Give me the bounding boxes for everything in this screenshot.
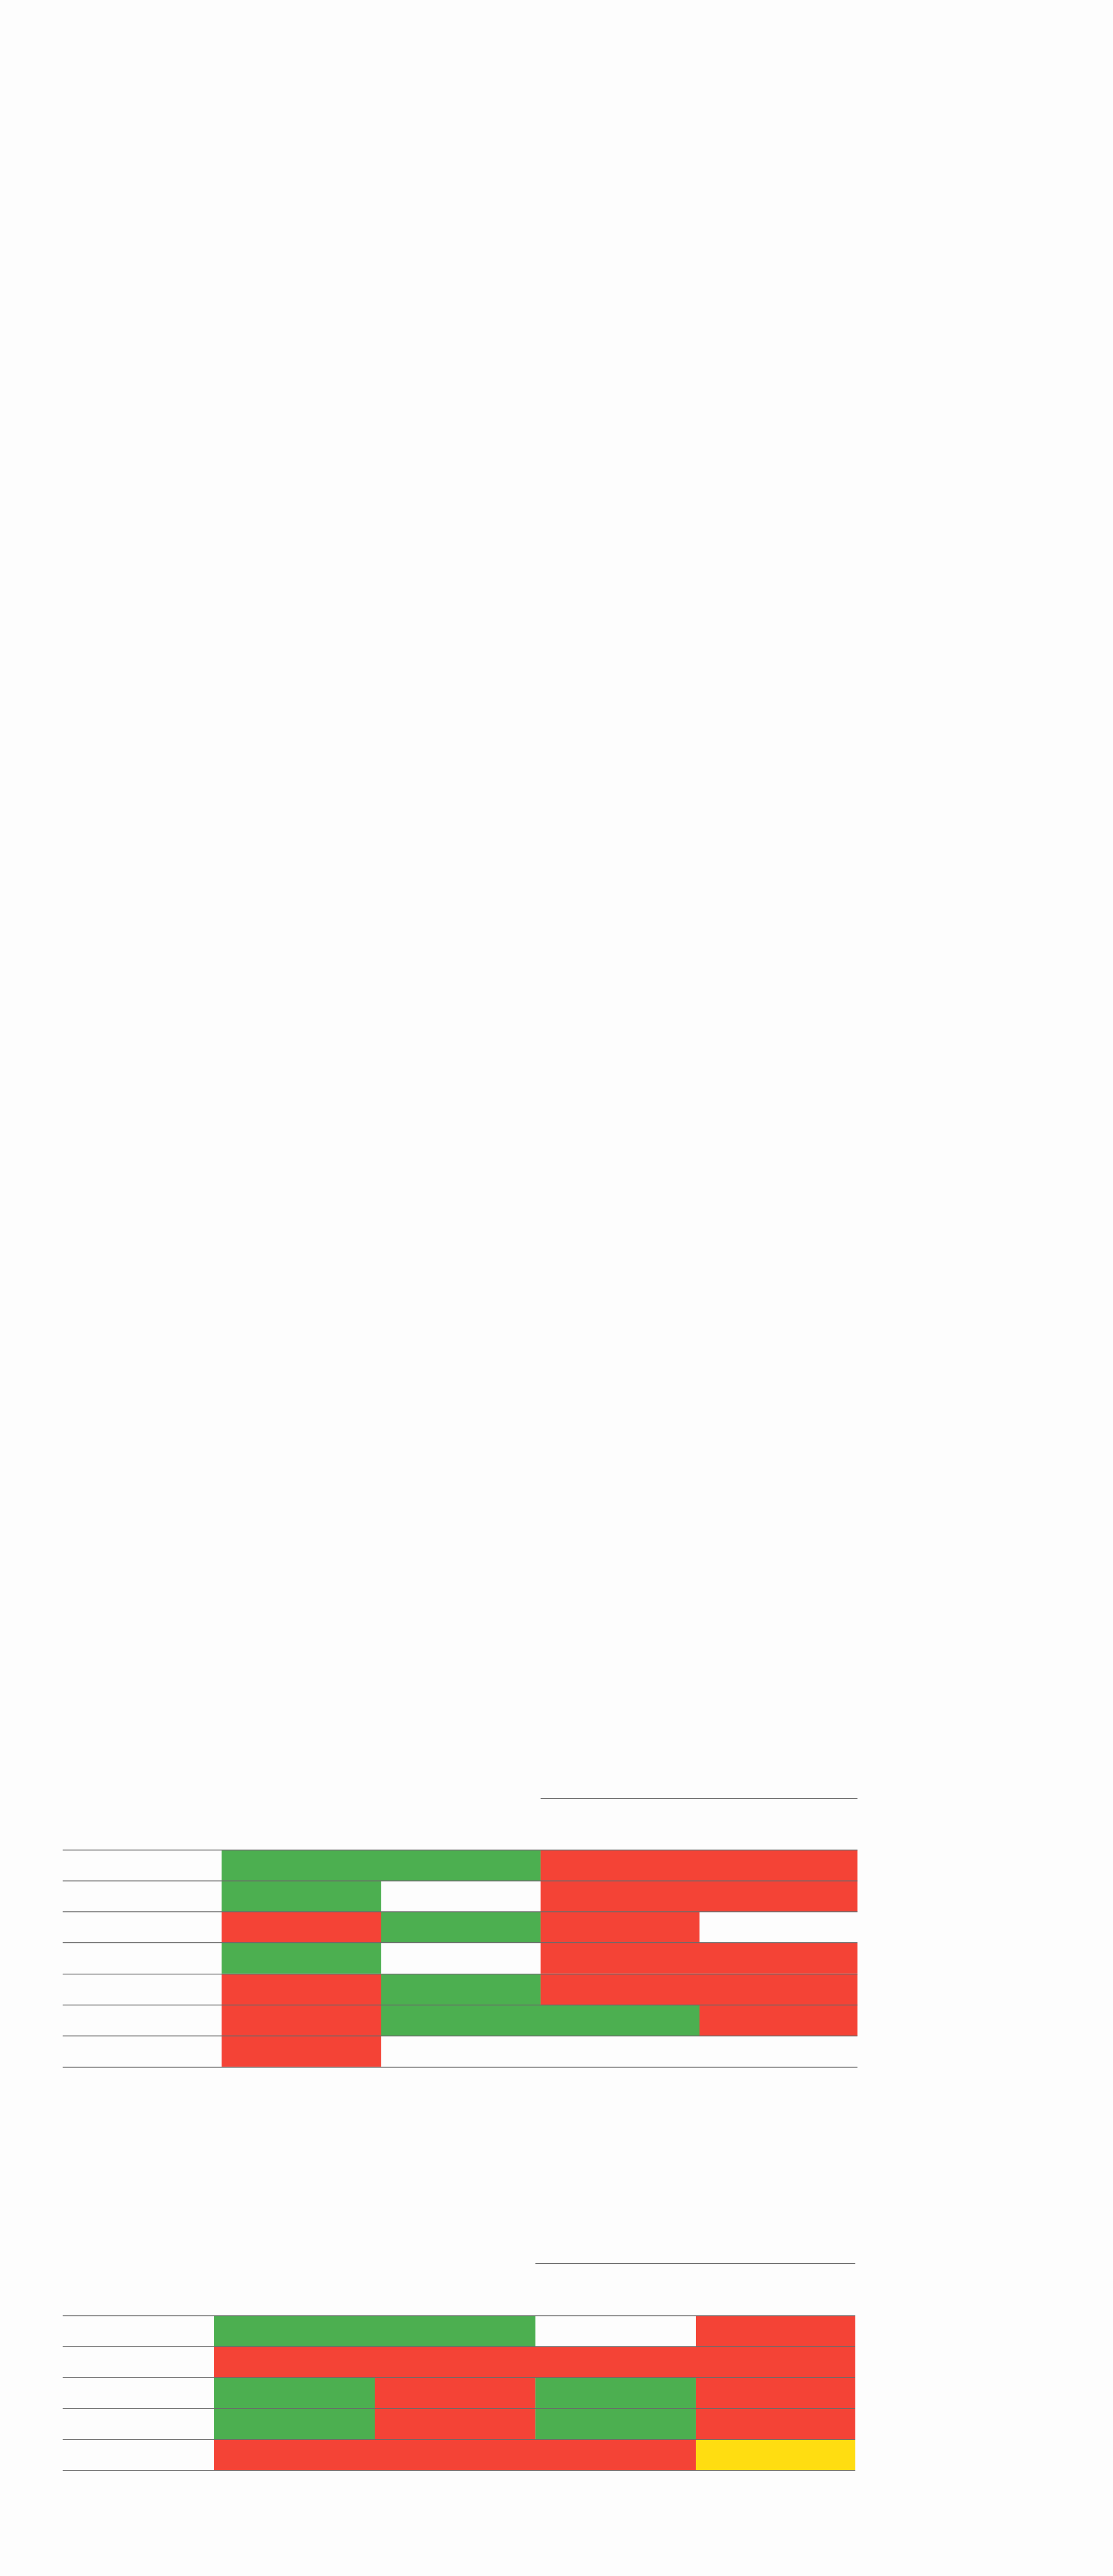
- grid table 1: [63, 1850, 857, 2068]
- header rule table 1: [541, 1798, 857, 1799]
- header rule table 2: [535, 2263, 855, 2264]
- panel: table 2: [63, 2263, 855, 2471]
- panel: table 1: [63, 1798, 857, 2068]
- grid table 2: [63, 2315, 855, 2471]
